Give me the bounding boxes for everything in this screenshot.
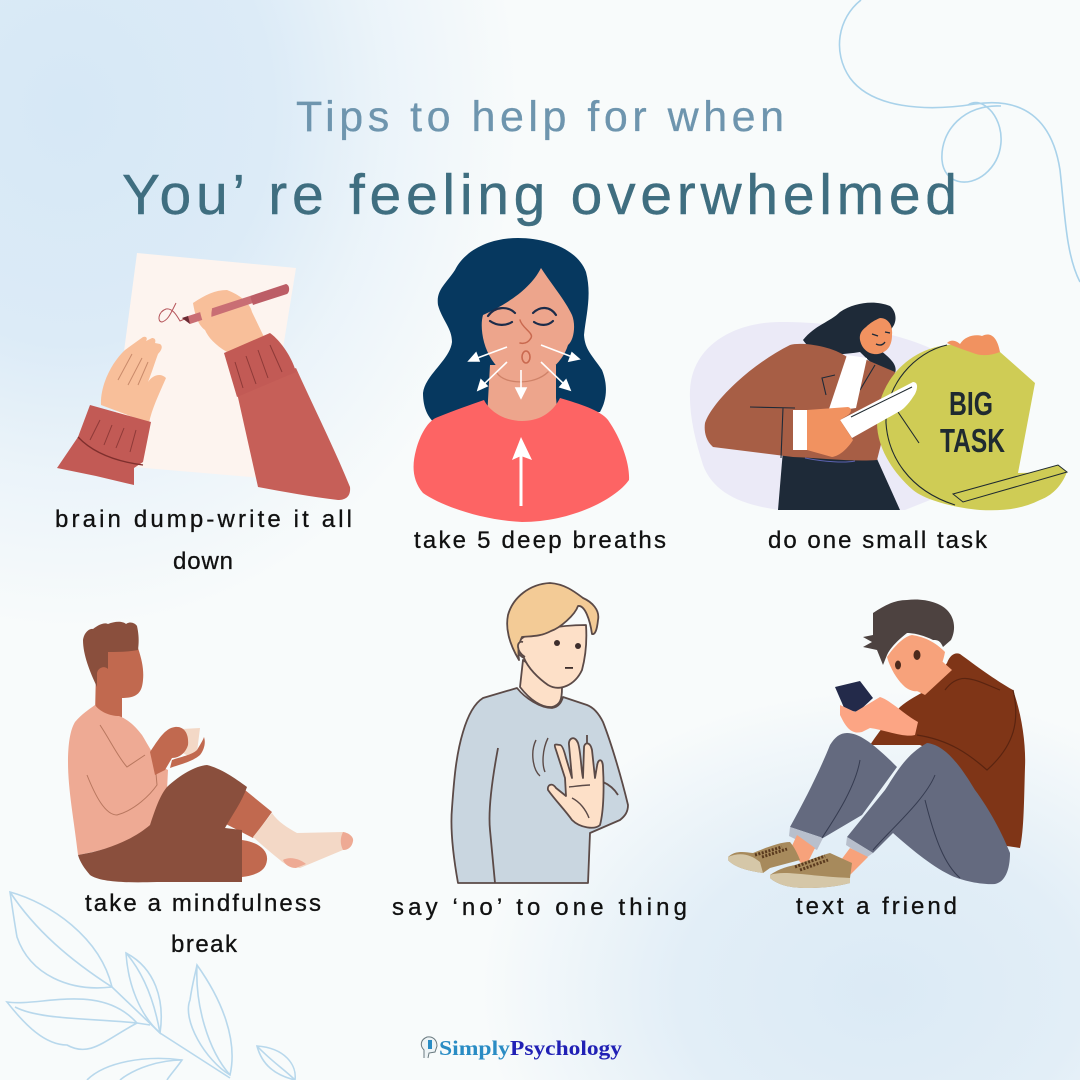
phone — [835, 681, 873, 712]
big task disk — [877, 344, 1067, 510]
logo head icon — [421, 1037, 437, 1058]
decorative curly line top right — [839, 0, 1080, 282]
label: brain dump — [55, 506, 352, 575]
belt line — [805, 458, 855, 462]
logo: Simply Psychology — [421, 1036, 623, 1060]
front leg — [847, 743, 1010, 884]
hair back — [803, 303, 896, 373]
sock — [253, 813, 353, 868]
ankles — [790, 835, 868, 877]
face — [887, 635, 945, 691]
trouser seams — [822, 760, 960, 878]
breath arrows — [469, 345, 579, 398]
panel: big task illustration — [690, 303, 1067, 510]
panel: say no illustration — [451, 583, 628, 883]
big task text: BIG — [949, 385, 993, 422]
calf — [222, 790, 272, 838]
subtitle line: Tips to help for when — [296, 93, 784, 141]
shoes — [728, 842, 852, 888]
label: brain dump: down — [173, 548, 233, 575]
facial features — [554, 640, 581, 669]
neck — [905, 655, 952, 695]
sweater seams — [87, 725, 157, 815]
big task disk: TASK — [940, 422, 1005, 459]
lavender blob — [690, 322, 930, 510]
neck and face — [95, 648, 143, 722]
back leg — [790, 733, 897, 838]
sweater seams — [489, 735, 618, 883]
knife — [840, 382, 917, 438]
eyes and nose — [488, 308, 556, 382]
jacket — [705, 344, 895, 461]
sleeve outline — [917, 678, 1016, 770]
eyes — [895, 650, 920, 670]
white cuff — [793, 410, 807, 450]
right sleeve — [237, 368, 350, 500]
ear — [518, 642, 525, 657]
panel: brain dump illustration — [57, 253, 350, 500]
trouser cuffs — [789, 827, 873, 858]
face details — [872, 332, 890, 345]
palm lines — [569, 785, 590, 818]
shirt — [414, 398, 629, 522]
sweater — [451, 688, 628, 883]
pants — [778, 450, 900, 510]
hand — [548, 738, 604, 828]
scribble — [159, 303, 187, 322]
hair — [863, 600, 954, 665]
left hand — [57, 337, 166, 485]
face — [517, 625, 586, 688]
label: brain dump: brain dump-write it all — [55, 506, 352, 533]
shirt — [828, 355, 867, 412]
neck — [520, 660, 562, 707]
label: mindfulness: take a mindfulness — [85, 890, 321, 917]
motion lines — [533, 738, 548, 776]
pen — [182, 284, 289, 324]
lower leg — [242, 840, 267, 877]
label: deep breaths: take 5 deep breaths — [414, 527, 666, 554]
main heading: You’ re feeling overwhelmed — [122, 163, 957, 227]
logo text: Simply — [439, 1036, 511, 1060]
cup — [182, 728, 200, 755]
hair — [423, 238, 606, 424]
label: say no: say ‘no’ to one thing — [392, 894, 687, 921]
right hand — [193, 290, 264, 352]
paper — [109, 253, 296, 478]
jacket seams — [750, 365, 875, 458]
decorative leaves bottom left — [7, 892, 295, 1080]
label: mindfulness: break — [171, 931, 238, 958]
hand on disk — [947, 335, 1000, 355]
cuff — [224, 333, 296, 397]
panel: deep breaths illustration — [414, 238, 629, 522]
label: small task: do one small task — [768, 527, 988, 554]
shorts — [78, 765, 247, 882]
logo: Simply Psychology: Psychology — [510, 1036, 623, 1060]
fingers over pen — [200, 304, 216, 336]
face — [482, 268, 574, 381]
hood — [870, 653, 1025, 848]
hair — [507, 583, 598, 660]
label: text a friend: text a friend — [796, 893, 957, 920]
hair — [83, 622, 139, 687]
panel: text a friend illustration — [728, 600, 1025, 888]
label: mindfulness — [85, 890, 321, 958]
title — [122, 93, 957, 227]
sweater — [68, 705, 168, 855]
neck — [486, 365, 560, 440]
face — [860, 318, 892, 354]
holding hand — [807, 407, 853, 457]
big arrow — [512, 437, 532, 506]
hands — [840, 697, 918, 736]
hands — [150, 727, 205, 775]
knife edge — [851, 387, 912, 417]
panel: mindfulness illustration — [68, 622, 353, 882]
